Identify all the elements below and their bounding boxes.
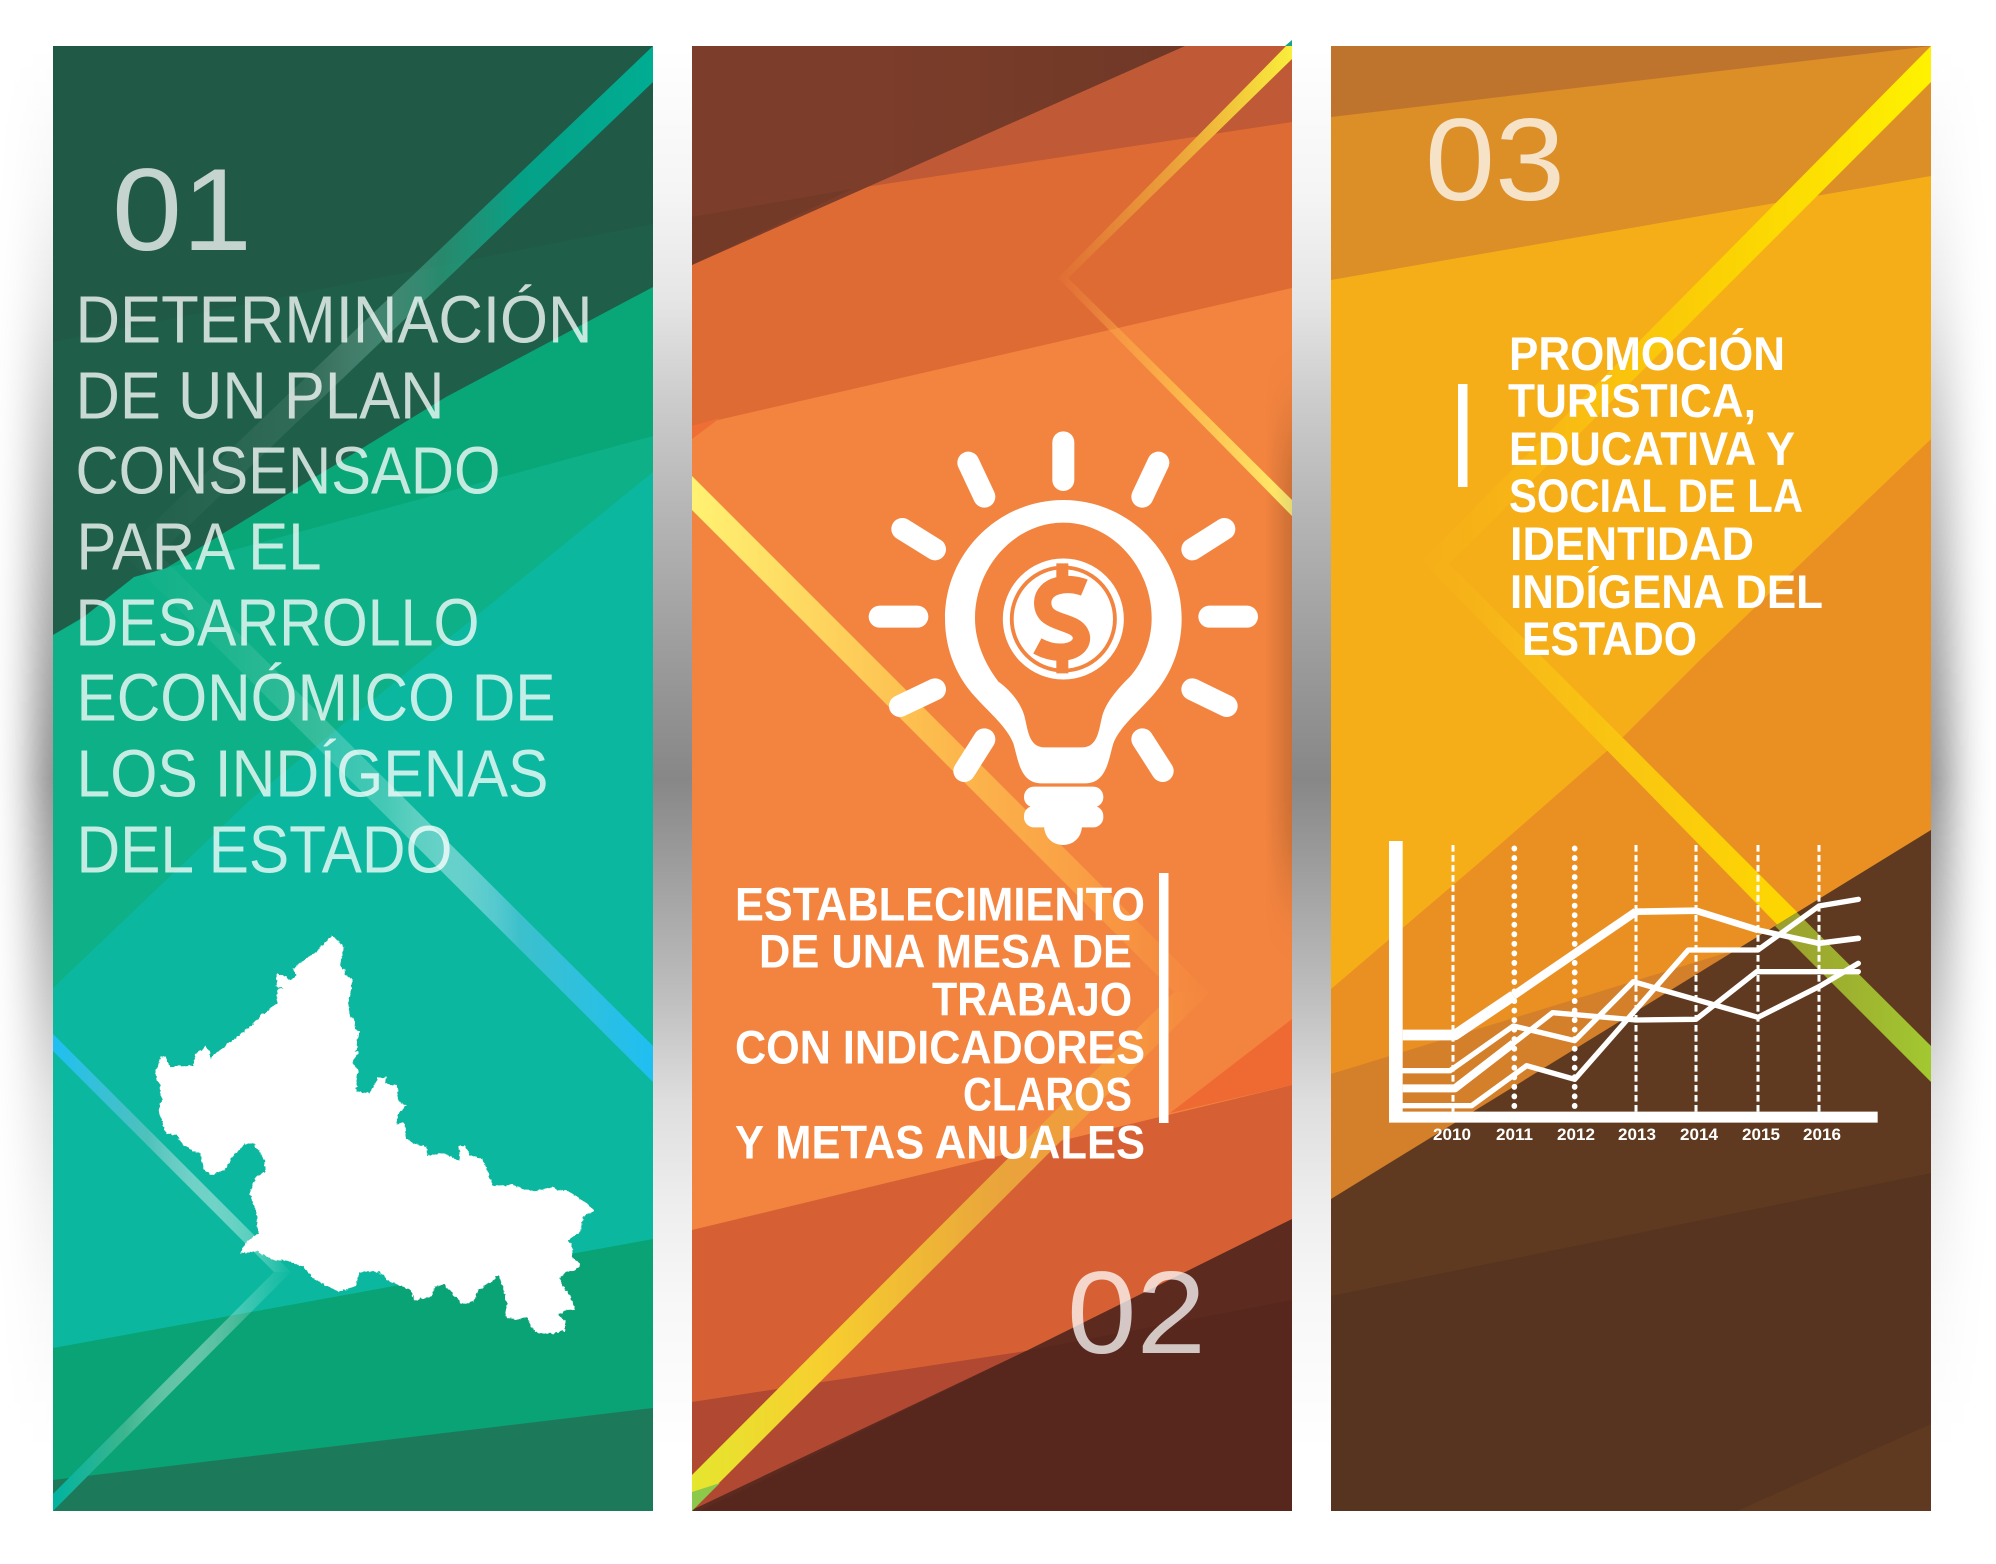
bulb outline bbox=[945, 500, 1182, 783]
vertical year guides bbox=[1453, 845, 1819, 1112]
heading: determinación: DETERMINACIÓN bbox=[76, 282, 592, 358]
heading: promoción: IDENTIDAD bbox=[1510, 518, 1754, 571]
year labels: 2010 bbox=[1433, 1126, 1471, 1144]
heading: promoción: SOCIAL DE LA bbox=[1509, 470, 1803, 523]
heading: determinación: DE UN PLAN bbox=[76, 358, 444, 434]
heading: establecimiento: CLAROS bbox=[963, 1068, 1132, 1122]
accent bar bbox=[1458, 384, 1468, 487]
accent bar bbox=[1159, 873, 1168, 1123]
year labels: 2011 bbox=[1496, 1126, 1533, 1144]
year labels: 2012 bbox=[1557, 1126, 1595, 1144]
heading: determinación: ECONÓMICO DE bbox=[76, 660, 556, 736]
heading: establecimiento: DE UNA MESA DE bbox=[759, 926, 1132, 978]
heading: promoción: PROMOCIÓN bbox=[1509, 326, 1785, 381]
line chart bbox=[1389, 841, 1878, 1144]
panel: 01 determinación de un plan bbox=[53, 46, 653, 1511]
heading: determinación: DESARROLLO bbox=[76, 586, 480, 660]
year labels: 2013 bbox=[1618, 1126, 1656, 1144]
heading: promoción: TURÍSTICA, bbox=[1508, 374, 1756, 428]
bulb base bbox=[1024, 787, 1103, 845]
coin bbox=[1006, 562, 1120, 676]
heading: determinación: CONSENSADO bbox=[76, 434, 500, 508]
icon: lightbulb with dollar coin bbox=[880, 442, 1247, 845]
heading: determinación: DEL ESTADO bbox=[76, 812, 452, 888]
heading: promoción: EDUCATIVA Y bbox=[1509, 423, 1795, 476]
number 01: 01 bbox=[112, 144, 252, 275]
heading: promoción bbox=[1508, 326, 1823, 666]
data lines bbox=[1403, 899, 1858, 1106]
heading: establecimiento bbox=[735, 878, 1145, 1170]
panel: 03 promoción turística bbox=[1331, 46, 1931, 1511]
year labels: 2014 bbox=[1680, 1126, 1719, 1144]
heading: determinación bbox=[76, 282, 592, 888]
heading: promoción: INDÍGENA DEL bbox=[1510, 565, 1823, 619]
axes bbox=[1389, 841, 1878, 1123]
number 02: 02 bbox=[1067, 1247, 1206, 1378]
panel: 02 mesa de trabajo bbox=[692, 40, 1292, 1511]
number 03: 03 bbox=[1425, 94, 1565, 225]
year labels bbox=[1433, 1126, 1841, 1144]
year labels: 2016 bbox=[1803, 1126, 1841, 1144]
heading: establecimiento: TRABAJO bbox=[932, 974, 1132, 1026]
light rays bbox=[880, 442, 1247, 771]
icon: state map bbox=[155, 935, 594, 1333]
heading: determinación: LOS INDÍGENAS bbox=[76, 736, 548, 812]
heading: establecimiento: Y METAS ANUALES bbox=[735, 1116, 1145, 1170]
heading: promoción: ESTADO bbox=[1522, 613, 1697, 666]
heading: establecimiento: ESTABLECIMIENTO bbox=[735, 878, 1145, 932]
year labels: 2015 bbox=[1742, 1126, 1780, 1144]
heading: establecimiento: CON INDICADORES bbox=[735, 1022, 1145, 1074]
stripe tip above panel bbox=[1285, 40, 1292, 46]
heading: determinación: PARA EL bbox=[76, 510, 322, 584]
